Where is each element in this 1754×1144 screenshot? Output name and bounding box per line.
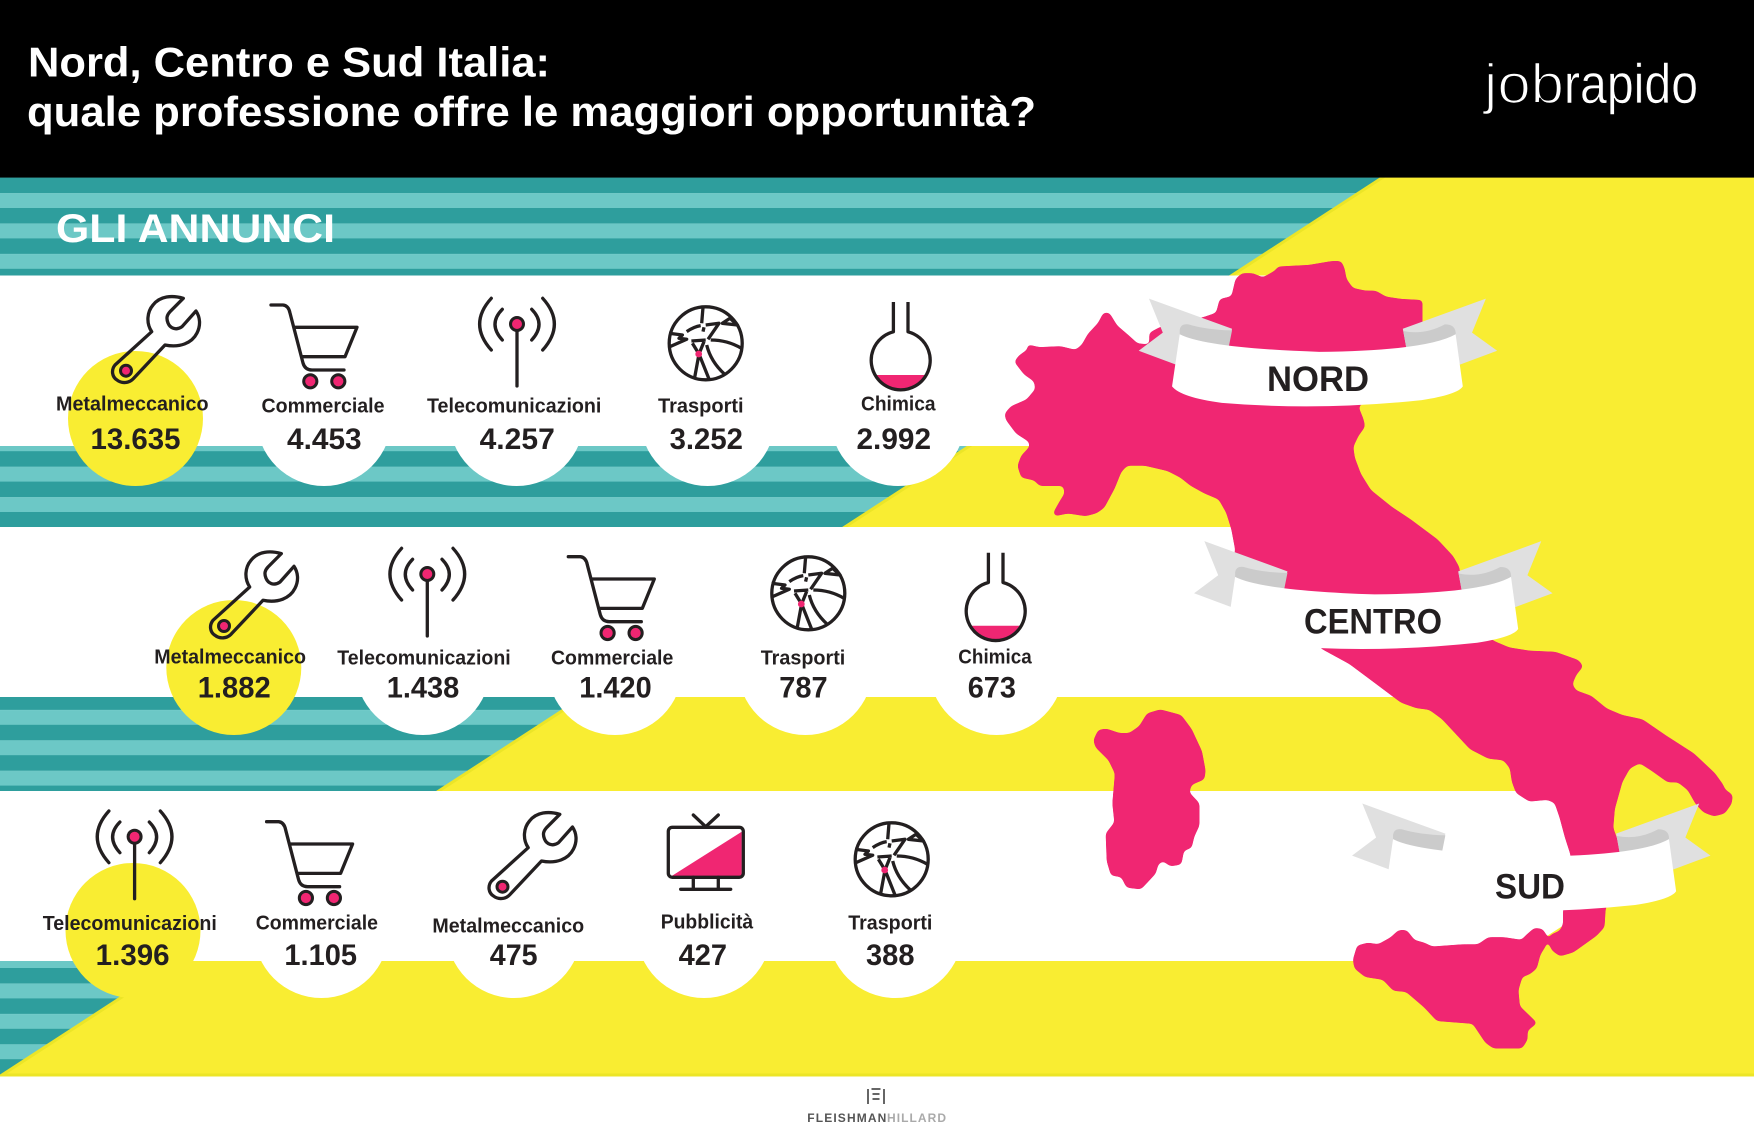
icon: wrench (211, 552, 298, 638)
icon: cart (568, 557, 654, 640)
stat: telecomunicazioni: Telecomunicazioni (337, 648, 511, 670)
panel: centro row (0, 527, 1411, 735)
stat: chimica (958, 646, 1033, 705)
ribbon: sud (1352, 803, 1710, 911)
icon: antenna (480, 298, 554, 386)
title: quale professione offre le maggiori opportunità? (27, 88, 1036, 135)
icon: globe (855, 823, 928, 896)
icon: antenna (97, 811, 172, 899)
stat: commerciale: Commerciale (262, 396, 384, 418)
stat: metalmeccanico (432, 916, 584, 972)
footer logo: fleishmanhillard: HILLARD (887, 1111, 946, 1125)
stat: trasporti: Trasporti (761, 648, 845, 670)
icon: wrench (113, 297, 200, 383)
logo: jobrapido: job (1482, 52, 1564, 115)
header: black bar (0, 0, 1754, 178)
title (27, 39, 1036, 135)
icon: globe (669, 307, 742, 380)
stat: trasporti (658, 396, 744, 456)
stat: commerciale (262, 396, 384, 456)
sardinia (1094, 710, 1205, 889)
stat: trasporti (848, 912, 932, 972)
stat: commerciale (551, 648, 673, 705)
icon: cart (267, 822, 353, 905)
stat: trasporti (761, 648, 845, 705)
stat: chimica: Chimica (861, 394, 936, 416)
footer logo: fleishmanhillard: FLEISHMAN (807, 1111, 886, 1125)
icon: wrench (489, 813, 576, 899)
sicily (1354, 929, 1547, 1048)
stat: commerciale: 4.453 (287, 423, 362, 456)
stat: trasporti: Trasporti (658, 396, 744, 418)
landmasses (1005, 262, 1732, 1048)
stat: trasporti: 3.252 (670, 423, 743, 456)
stat: metalmeccanico: Metalmeccanico (154, 646, 306, 668)
stat: commerciale: 1.420 (579, 672, 652, 705)
stat: telecomunicazioni: 4.257 (480, 423, 555, 456)
stat: pubblicita: Pubblicità (661, 911, 754, 933)
stat: metalmeccanico: 13.635 (90, 423, 180, 456)
stat: telecomunicazioni (427, 396, 601, 456)
label: nord: NORD (1267, 360, 1369, 399)
stat: metalmeccanico: Metalmeccanico (432, 916, 584, 938)
label: centro: CENTRO (1304, 602, 1442, 641)
stat: chimica: Chimica (958, 646, 1033, 668)
stat: pubblicita: 427 (679, 939, 727, 972)
highlight circle (68, 351, 203, 486)
icon: flask (966, 553, 1025, 641)
stat: metalmeccanico: 475 (490, 939, 538, 972)
stat: telecomunicazioni: 1.438 (387, 672, 459, 705)
stat: commerciale (256, 912, 378, 972)
striped teal background (0, 177, 1754, 1075)
footer logo: fleishmanhillard (807, 1089, 946, 1125)
map: Italy (1005, 262, 1732, 1048)
panel: nord row (0, 276, 1309, 486)
stat: trasporti: 388 (866, 939, 914, 972)
title: Nord, Centro e Sud Italia: (28, 39, 550, 86)
heading: gli annunci: GLI ANNUNCI (56, 207, 335, 251)
stat: telecomunicazioni: Telecomunicazioni (427, 396, 601, 418)
stat: commerciale: Commerciale (256, 912, 378, 934)
yellow diagonal background (2, 170, 1754, 1075)
icon: globe (772, 557, 845, 630)
ribbon: centro (1194, 541, 1553, 649)
icon: antenna (390, 548, 465, 636)
icon: cart (271, 305, 357, 388)
icon: tv (668, 815, 743, 889)
ribbon: nord (1139, 299, 1497, 406)
stat: chimica: 2.992 (856, 423, 931, 456)
highlight circle (66, 863, 200, 998)
stat: telecomunicazioni (337, 648, 511, 705)
icon: flask (871, 302, 930, 390)
stat: chimica (856, 394, 936, 456)
stat: metalmeccanico: 1.882 (198, 672, 271, 705)
stat: metalmeccanico (56, 394, 208, 456)
stat: telecomunicazioni: Telecomunicazioni (43, 913, 217, 935)
label: sud: SUD (1495, 868, 1565, 906)
stat: trasporti: 787 (779, 672, 828, 705)
stat: telecomunicazioni (43, 913, 217, 972)
icon: fh mark (868, 1089, 884, 1104)
stat: pubblicita (661, 911, 754, 972)
stat: metalmeccanico (154, 646, 306, 705)
stat: trasporti: Trasporti (848, 912, 932, 934)
stat: metalmeccanico: Metalmeccanico (56, 394, 208, 416)
panel: sud row (0, 791, 1591, 998)
logo: jobrapido: rapido (1564, 52, 1698, 115)
logo: jobrapido (1482, 52, 1698, 115)
stat: telecomunicazioni: 1.396 (96, 939, 170, 972)
stat: commerciale: 1.105 (284, 939, 357, 972)
highlight circle (166, 600, 301, 735)
stat: commerciale: Commerciale (551, 648, 673, 670)
stat: chimica: 673 (968, 672, 1016, 705)
mainland (1005, 262, 1732, 956)
